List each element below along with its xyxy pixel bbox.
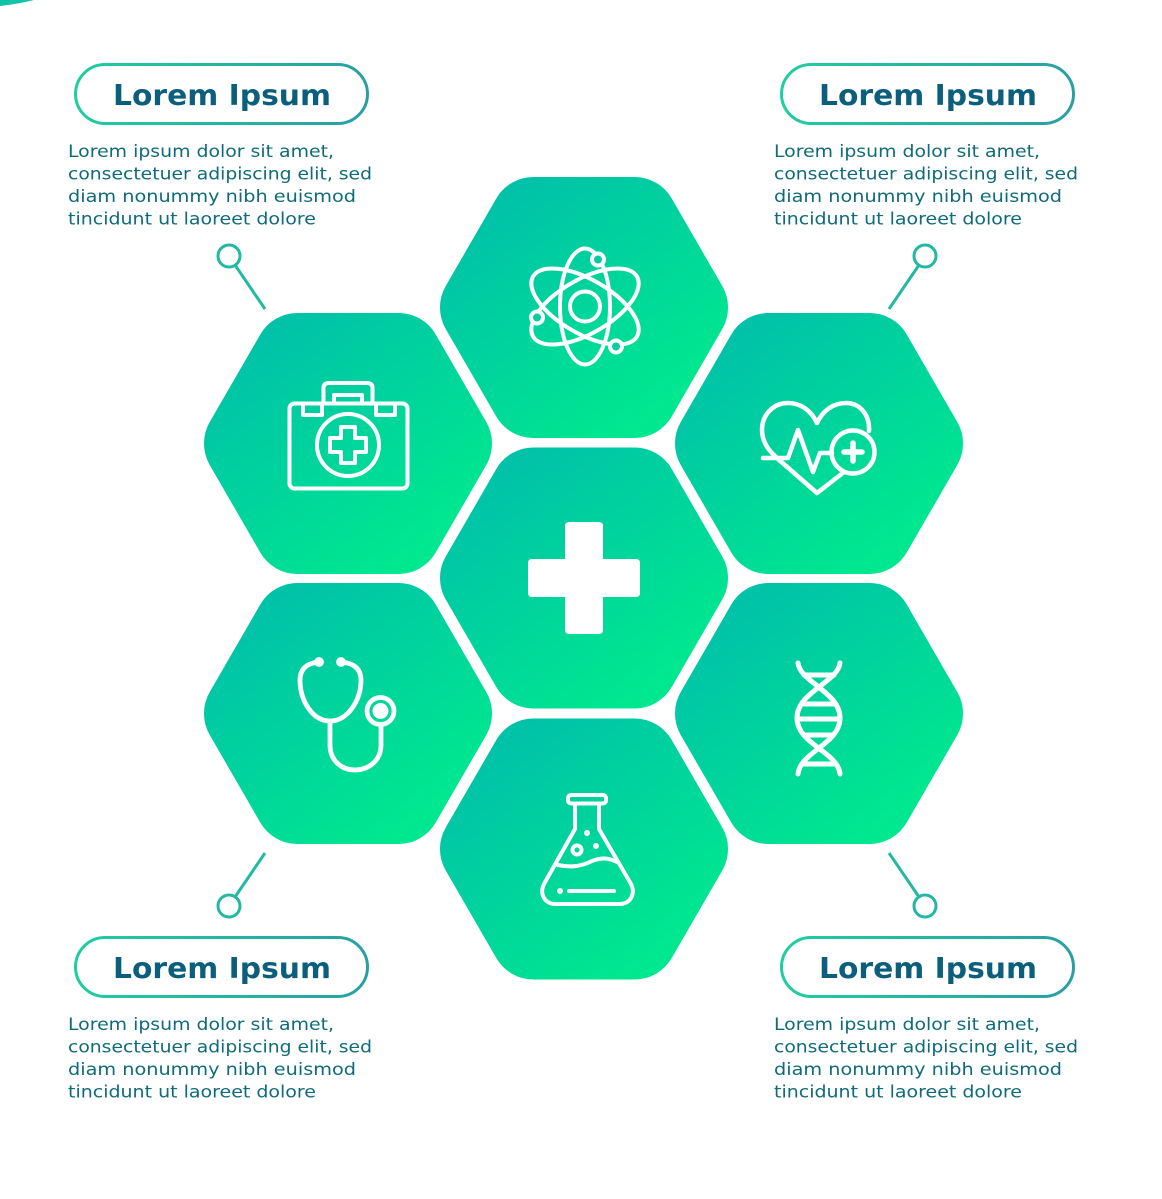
text block: diam nonummy nibh euismod xyxy=(774,187,1062,207)
text block: diam nonummy nibh euismod xyxy=(774,1060,1062,1080)
text block: consectetuer adipiscing elit, sed xyxy=(68,164,372,184)
text block xyxy=(68,1015,372,1102)
heading pill xyxy=(76,938,368,996)
icon: first aid kit xyxy=(290,383,408,488)
panel: top right label xyxy=(774,64,1078,230)
icon: flask xyxy=(542,795,633,904)
hexagon: DNA xyxy=(675,583,963,844)
heading pill: Lorem Ipsum xyxy=(113,952,331,985)
text block xyxy=(68,142,372,230)
icon: heart with pulse xyxy=(762,403,874,493)
hexagon: stethoscope xyxy=(204,583,492,844)
corner accent xyxy=(0,0,34,6)
connector: top right xyxy=(889,245,936,309)
panel: bottom right label xyxy=(774,938,1078,1102)
text block: diam nonummy nibh euismod xyxy=(68,187,356,207)
icon: plus xyxy=(528,522,640,634)
text block: tincidunt ut laoreet dolore xyxy=(68,1082,316,1102)
text block: Lorem ipsum dolor sit amet, xyxy=(774,1015,1040,1035)
text block: diam nonummy nibh euismod xyxy=(68,1060,356,1080)
text block: Lorem ipsum dolor sit amet, xyxy=(774,142,1040,162)
heading pill: Lorem Ipsum xyxy=(113,79,331,112)
heading pill xyxy=(782,64,1074,124)
icon: atom xyxy=(520,248,650,364)
connector: bottom right xyxy=(889,853,936,917)
text block: tincidunt ut laoreet dolore xyxy=(774,1082,1022,1102)
text block xyxy=(774,1015,1078,1102)
hexagon: atom xyxy=(440,177,728,438)
text block: consectetuer adipiscing elit, sed xyxy=(774,1038,1078,1058)
hexagon: medical kit xyxy=(204,313,492,574)
panel: bottom left label xyxy=(68,938,372,1102)
heading pill xyxy=(782,938,1074,996)
icon: stethoscope xyxy=(300,660,394,770)
heading pill: Lorem Ipsum xyxy=(819,952,1037,985)
panel: top left label xyxy=(68,64,372,230)
text block xyxy=(774,142,1078,230)
text block: Lorem ipsum dolor sit amet, xyxy=(68,142,334,162)
text block: tincidunt ut laoreet dolore xyxy=(774,210,1022,230)
icon: DNA helix xyxy=(797,663,840,774)
heading pill xyxy=(76,64,368,124)
hexagon: heart xyxy=(675,313,963,574)
text block: consectetuer adipiscing elit, sed xyxy=(68,1038,372,1058)
connector: bottom left xyxy=(218,853,265,917)
text block: Lorem ipsum dolor sit amet, xyxy=(68,1015,334,1035)
hexagon: centre plus xyxy=(440,447,728,709)
connector: top left xyxy=(218,245,265,309)
text block: consectetuer adipiscing elit, sed xyxy=(774,164,1078,184)
hexagon: flask xyxy=(440,718,728,980)
text block: tincidunt ut laoreet dolore xyxy=(68,210,316,230)
heading pill: Lorem Ipsum xyxy=(819,79,1037,112)
